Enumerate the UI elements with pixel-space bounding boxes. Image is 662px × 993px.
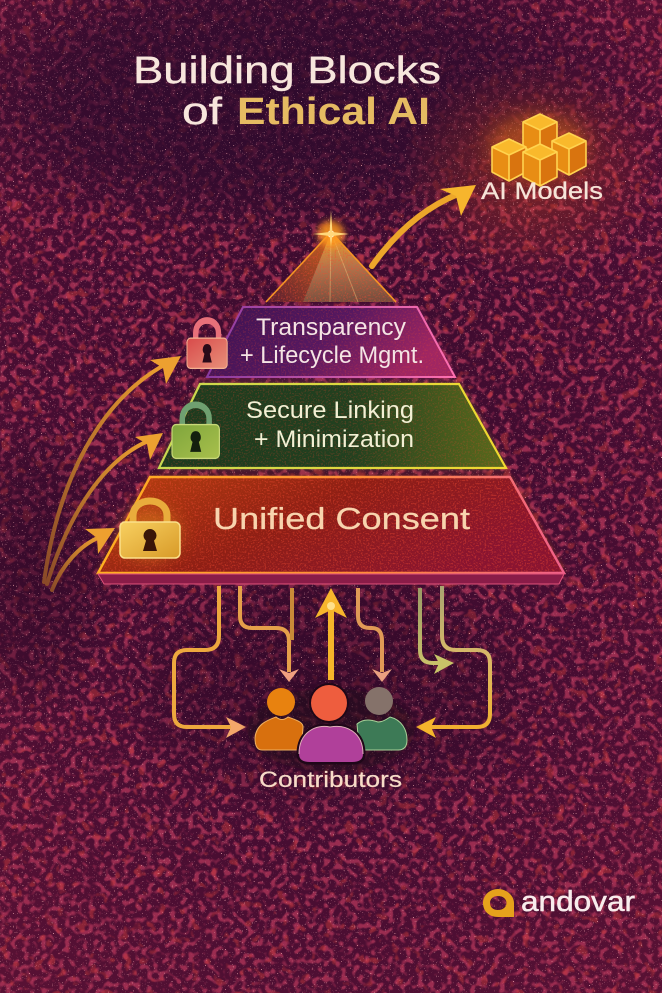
connector: left loop xyxy=(174,586,246,738)
arrow: pyramid top to AI Models xyxy=(372,185,476,266)
person: right (green) xyxy=(357,687,407,750)
icon: bottom lock (gold) xyxy=(120,501,180,560)
arrow to middle lock xyxy=(47,433,163,584)
title xyxy=(133,50,441,133)
pyramid xyxy=(96,210,566,584)
icon: top lock (red) xyxy=(187,321,227,368)
connectors: pyramid base to contributors xyxy=(174,586,490,738)
icon: middle lock (green) xyxy=(172,405,219,458)
connector: right loop xyxy=(416,586,490,738)
arrow to bottom lock xyxy=(52,528,115,590)
connector: inner left xyxy=(240,586,299,682)
tier label: Secure Linking: Secure Linking xyxy=(246,397,414,424)
icon: contributors group xyxy=(247,683,415,772)
tier label: Unified Consent: Unified Consent xyxy=(213,501,470,536)
logo wordmark: andovar xyxy=(521,886,635,918)
person: left (orange) xyxy=(255,688,303,750)
tier label: + Lifecycle Mgmt.: + Lifecycle Mgmt. xyxy=(240,342,424,369)
tier label: Transparency: Transparency xyxy=(256,314,406,341)
title line: Building Blocks: Building Blocks xyxy=(133,50,441,92)
icon: AI model cubes xyxy=(488,113,588,186)
logo: andovar xyxy=(483,886,635,918)
icon: andovar logo mark xyxy=(483,889,514,917)
connector: inner right xyxy=(358,588,392,682)
person: centre (purple) xyxy=(299,683,363,762)
connector: olive arrow xyxy=(420,588,454,674)
connector: short left xyxy=(290,588,294,640)
arrows: rising from the ground to each lock xyxy=(44,356,181,590)
tier: Unified Consent xyxy=(96,475,566,584)
tier: Secure Linking + Minimization xyxy=(157,382,508,470)
title line: of: of xyxy=(182,91,223,133)
label: AI Models: AI Models xyxy=(481,178,603,205)
pyramid capstone xyxy=(260,210,400,304)
tier: Transparency + Lifecycle Mgmt. xyxy=(205,305,457,379)
title line: Ethical AI: Ethical AI xyxy=(237,91,430,133)
connector: centre upward arrow xyxy=(315,588,347,680)
label: Contributors: Contributors xyxy=(259,767,402,792)
arrow to top lock xyxy=(44,356,181,582)
tier label: + Minimization: + Minimization xyxy=(254,426,414,453)
base slab xyxy=(98,574,564,584)
